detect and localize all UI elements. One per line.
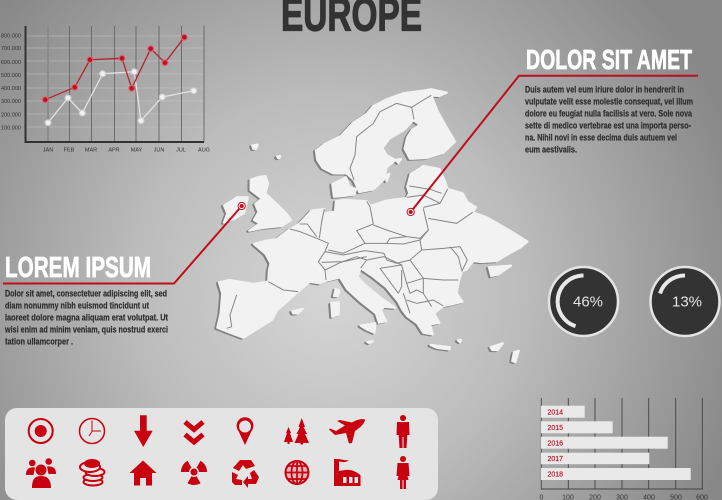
chart y-axis labels: 700.000 (1, 46, 21, 52)
heading: Lorem ipsum: LOREM IPSUM (5, 252, 151, 284)
chart x-axis labels (43, 148, 210, 154)
chart y-axis labels: 500.000 (1, 73, 21, 79)
callout: Lorem ipsum (3, 202, 245, 346)
bar 2017 (541, 453, 649, 464)
bar 2014 (541, 406, 585, 418)
chart x-axis labels: MAY (131, 148, 143, 154)
chart x-axis labels: FEB (64, 148, 75, 154)
icon: coins (80, 460, 104, 486)
icon: clock (80, 418, 104, 444)
bar 2015: 2015 (548, 425, 563, 432)
icon: trees (284, 418, 309, 444)
white data series (45, 69, 197, 126)
map of Europe (217, 89, 527, 362)
bar chart x-axis labels (540, 494, 708, 500)
text block: Dolor sit amet: na. Nihil novi in esse decima duis autuem vel (525, 132, 677, 142)
bar 2014: 2014 (548, 409, 563, 416)
icon: map pin (237, 417, 253, 445)
text block: Lorem ipsum: wisi enim ad minim veniam, quis nostrud exerci (4, 324, 168, 334)
text block: Lorem ipsum: Dolor sit amet, consectetuer adipiscing elit, sed (5, 288, 167, 298)
chart x-axis labels: APR (108, 148, 120, 154)
bar 2018: 2018 (548, 472, 563, 479)
icon: target (29, 419, 53, 443)
text block: Lorem ipsum: tation ullamcorper . (5, 336, 73, 346)
bar 2017: 2017 (548, 456, 563, 463)
text block: Lorem ipsum: diam nonummy nibh euismod tincidunt ut (5, 300, 149, 310)
mainland (217, 166, 527, 338)
chart y-axis labels: 100.000 (1, 126, 21, 132)
icon: woman (396, 456, 410, 489)
chart x-axis labels: JUN (154, 148, 164, 154)
bar chart (540, 398, 708, 500)
icon: double chevron (185, 422, 203, 442)
bar 2016 (541, 437, 668, 449)
chart y-axis labels: 400.000 (1, 86, 21, 92)
chart x-axis labels: JUL (176, 148, 186, 154)
bar 2018 (541, 468, 691, 480)
donut: 46%: 46% (573, 294, 603, 310)
red data series (42, 34, 187, 103)
icon: down arrow (134, 415, 153, 447)
text block: Dolor sit amet (525, 84, 693, 154)
icon: people (26, 458, 56, 488)
icon: house (130, 460, 156, 486)
national borders (227, 95, 473, 328)
Scandinavia (316, 89, 455, 192)
callout: Dolor sit amet (407, 44, 698, 216)
pin: Poland (407, 208, 414, 216)
panel: icons (5, 408, 438, 500)
icon: man (396, 415, 410, 448)
icon: airplane (329, 419, 365, 444)
icon: factory (334, 459, 360, 486)
chart x-axis labels: AUG (198, 148, 210, 154)
pin: Ireland (238, 202, 245, 210)
Denmark (332, 177, 356, 197)
text block: Lorem ipsum: laoreet dolore magna aliquam erat volutpat. Ut (5, 312, 168, 322)
chart x-axis labels: MAR (85, 148, 97, 154)
chart y-axis labels (1, 34, 21, 132)
icon: radiation (181, 461, 207, 485)
chart y-axis labels: 600.000 (1, 60, 21, 66)
chart y-axis labels: 800.000 (1, 34, 21, 40)
icon: recycle (232, 460, 259, 488)
bar 2016: 2016 (548, 440, 563, 447)
bar 2015 (541, 421, 613, 433)
text block: Lorem ipsum (4, 288, 168, 346)
chart y-axis labels: 300.000 (1, 99, 21, 105)
British Isles (224, 176, 291, 231)
donut: 46% (549, 267, 618, 336)
chart x-axis labels: JAN (43, 148, 53, 154)
icon: globe (286, 461, 308, 484)
text block: Dolor sit amet: eum aestivalis. (525, 144, 577, 154)
donut: 13% (650, 267, 720, 336)
text block: Dolor sit amet: Duis autem vel eum iriure dolor in hendrerit in (525, 84, 684, 94)
chart y-axis labels: 200.000 (1, 112, 21, 118)
line chart (1, 26, 210, 154)
islands (252, 145, 519, 362)
donut: 13%: 13% (672, 294, 702, 310)
